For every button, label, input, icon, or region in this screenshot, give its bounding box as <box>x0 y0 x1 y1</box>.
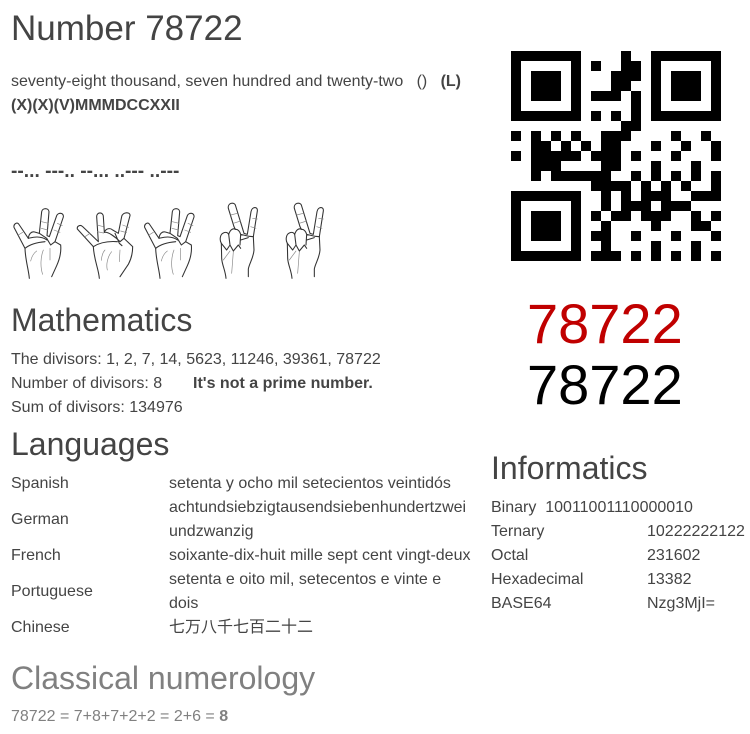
sum of divisors: Sum of divisors: 134976 <box>11 399 183 416</box>
icon: sign language hands <box>13 202 324 279</box>
languages table: French <box>11 547 61 564</box>
heading: informatics: Informatics <box>491 450 647 486</box>
informatics table: Octal <box>491 547 528 564</box>
languages table: Spanish <box>11 475 69 492</box>
informatics table: Nzg3MjI= <box>647 595 715 612</box>
black number: 78722 <box>527 353 683 416</box>
informatics table: Hexadecimal <box>491 571 583 588</box>
informatics table: Ternary <box>491 523 544 540</box>
languages table <box>11 475 470 636</box>
heading: languages: Languages <box>11 426 169 462</box>
informatics table: Binary 10011001110000010 <box>491 499 693 516</box>
languages table: Portuguese <box>11 583 93 600</box>
languages table: Chinese <box>11 619 70 636</box>
number of divisors: Number of divisors: 8 <box>11 375 162 392</box>
informatics table: 10222222122 <box>647 523 745 540</box>
informatics table: 13382 <box>647 571 692 588</box>
QR code <box>511 51 721 261</box>
languages table: 七万八千七百二十二 <box>169 619 313 636</box>
languages table: soixante-dix-huit mille sept cent vingt-deux <box>169 547 470 564</box>
morse code: --... ---.. --... ..--- ..--- <box>11 161 179 182</box>
prime status: It's not a prime number. <box>193 375 373 392</box>
heading: classical numerology: Classical numerology <box>11 660 315 696</box>
languages table: setenta y ocho mil setecientos veintidós <box>169 475 451 492</box>
languages table: setenta e oito mil, setecentos e vinte e <box>169 571 441 588</box>
languages table: undzwanzig <box>169 523 254 540</box>
title: Number 78722 <box>11 9 243 48</box>
red number: 78722 <box>527 292 683 355</box>
divisors list: The divisors: 1, 2, 7, 14, 5623, 11246, 39361, 78722 <box>11 351 381 368</box>
informatics table: 231602 <box>647 547 700 564</box>
languages table: German <box>11 511 69 528</box>
informatics table: BASE64 <box>491 595 551 612</box>
informatics table <box>491 499 745 612</box>
roman numeral: (X)(X)(V)MMMDCCXXII <box>11 97 180 114</box>
languages table: dois <box>169 595 198 612</box>
number in words: seventy-eight thousand, seven hundred and twenty-two () (L) <box>11 73 461 90</box>
heading: mathematics: Mathematics <box>11 302 192 338</box>
numerology sum: 78722 = 7+8+7+2+2 = 2+6 = 8 <box>11 708 228 725</box>
languages table: achtundsiebzigtausendsiebenhundertzwei <box>169 499 466 516</box>
